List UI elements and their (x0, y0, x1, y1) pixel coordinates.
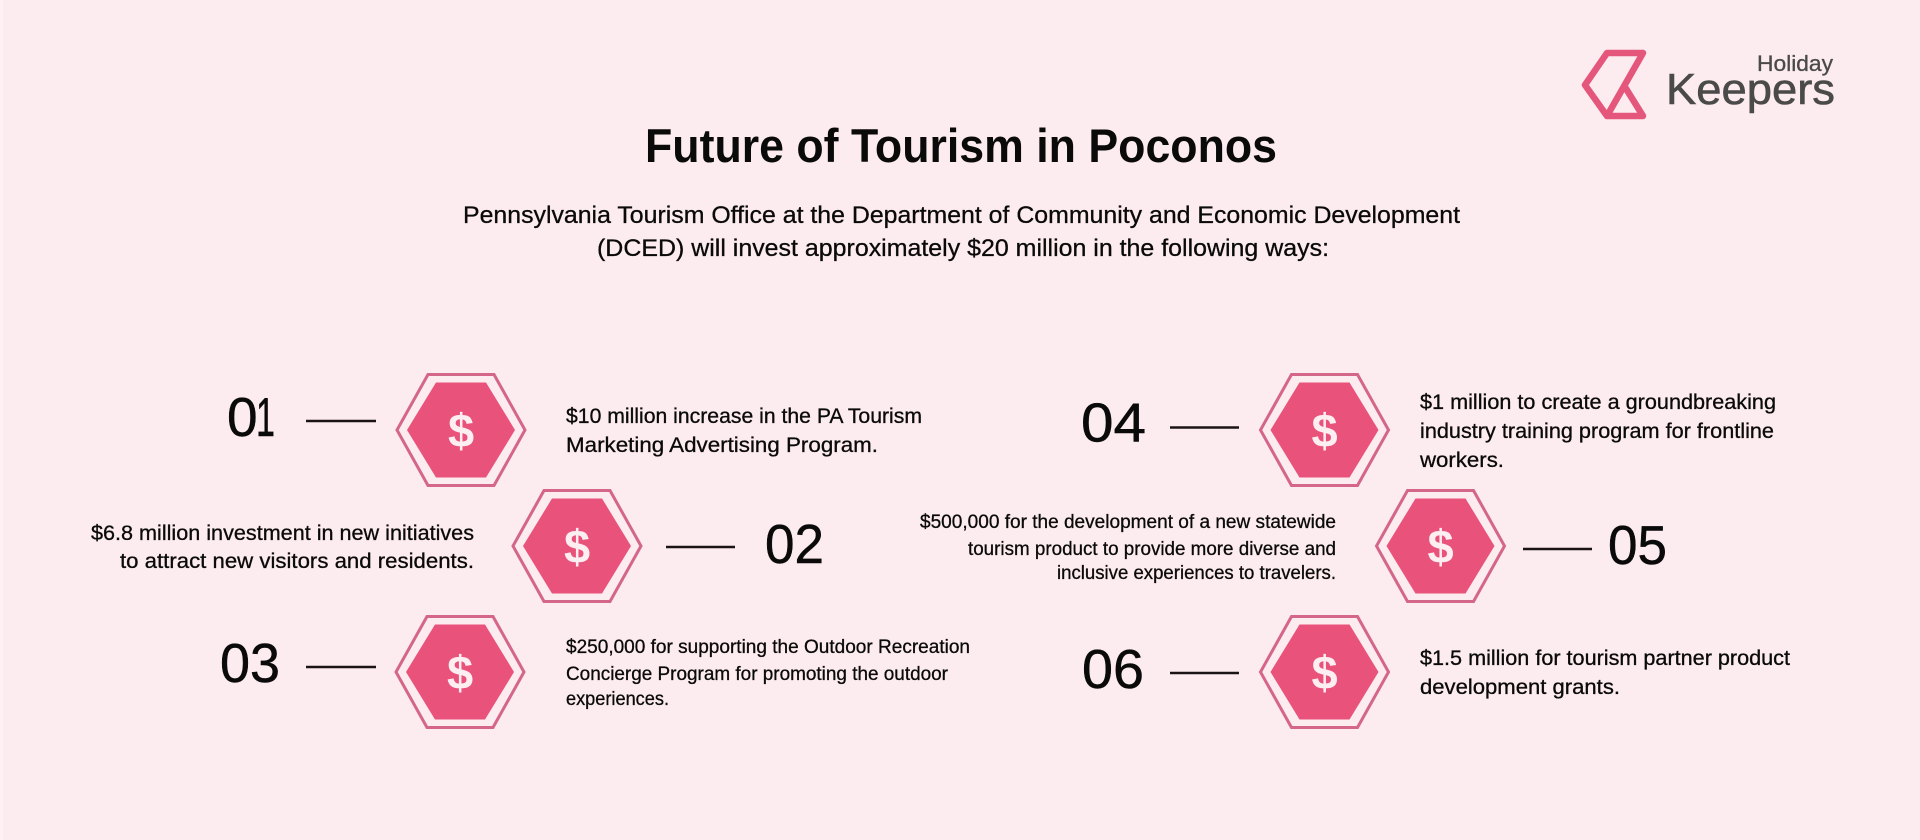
number 06: 06 (1082, 638, 1144, 700)
title: Future of Tourism in Poconos (645, 119, 1277, 172)
connector 01 (306, 420, 376, 422)
text 05: inclusive experiences to travelers. (1057, 562, 1336, 584)
icon: logo mark (1585, 53, 1643, 116)
number 02: 02 (765, 513, 824, 575)
text 02: to attract new visitors and residents. (120, 550, 474, 573)
connector 02 (666, 546, 735, 548)
number 01: 1 (256, 386, 275, 448)
icon: hexagon dollar 01: $ (448, 404, 474, 457)
icon: hexagon dollar 04: $ (1311, 404, 1338, 457)
text 01: $10 million increase in the PA Tourism (566, 405, 922, 428)
icon: hexagon dollar 06: $ (1311, 646, 1338, 699)
text 05: $500,000 for the development of a new statewide (920, 511, 1336, 533)
text 04 (1419, 391, 1776, 472)
text 03: $250,000 for supporting the Outdoor Recreation (566, 636, 970, 658)
text 03: Concierge Program for promoting the outdoor (566, 663, 948, 685)
number 05: 05 (1608, 514, 1667, 576)
icon: hexagon dollar 02 (513, 490, 641, 602)
icon: hexagon dollar 03 (396, 616, 524, 728)
icon: hexagon dollar 02: $ (564, 520, 590, 573)
number 04: 04 (1081, 392, 1146, 454)
text 03 (566, 636, 970, 710)
item 02 (91, 490, 824, 602)
text 06 (1420, 647, 1790, 699)
text 04: industry training program for frontline (1420, 420, 1774, 443)
logo: Holiday Keepers (1585, 51, 1835, 116)
text 06: $1.5 million for tourism partner product (1420, 647, 1790, 670)
number 03: 03 (220, 632, 280, 694)
text 06: development grants. (1420, 676, 1620, 699)
icon: hexagon dollar 01 (397, 374, 525, 486)
icon: hexagon dollar 05: $ (1427, 520, 1454, 573)
item 03 (220, 616, 970, 728)
text 05 (920, 511, 1336, 584)
text 03: experiences. (566, 688, 669, 710)
item 05 (920, 490, 1667, 602)
number 01: 0 (227, 386, 258, 448)
logo word: Holiday: Holiday (1757, 51, 1833, 76)
icon: hexagon dollar 05 (1376, 490, 1504, 602)
text 04: workers. (1419, 449, 1504, 472)
icon: hexagon dollar 04 (1260, 374, 1388, 486)
text 04: $1 million to create a groundbreaking (1420, 391, 1776, 414)
intro text: (DCED) will invest approximately $20 million in the following ways: (597, 235, 1329, 262)
icon: hexagon dollar 06 (1260, 616, 1388, 728)
item 04 (1081, 374, 1776, 486)
item 01 (227, 374, 922, 486)
connector 03 (306, 666, 376, 668)
connector 05 (1523, 548, 1592, 550)
item 06 (1082, 616, 1790, 728)
connector 04 (1170, 426, 1239, 429)
intro text (463, 202, 1460, 262)
text 05: tourism product to provide more diverse and (968, 538, 1336, 560)
icon: hexagon dollar 03: $ (447, 646, 473, 699)
text 02: $6.8 million investment in new initiatives (91, 522, 474, 545)
intro text: Pennsylvania Tourism Office at the Department of Community and Economic Development (463, 202, 1460, 229)
text 01: Marketing Advertising Program. (566, 434, 878, 457)
text 01 (566, 405, 922, 457)
logo word: Keepers: Keepers (1666, 65, 1835, 114)
text 02 (91, 522, 474, 573)
connector 06 (1170, 672, 1239, 674)
